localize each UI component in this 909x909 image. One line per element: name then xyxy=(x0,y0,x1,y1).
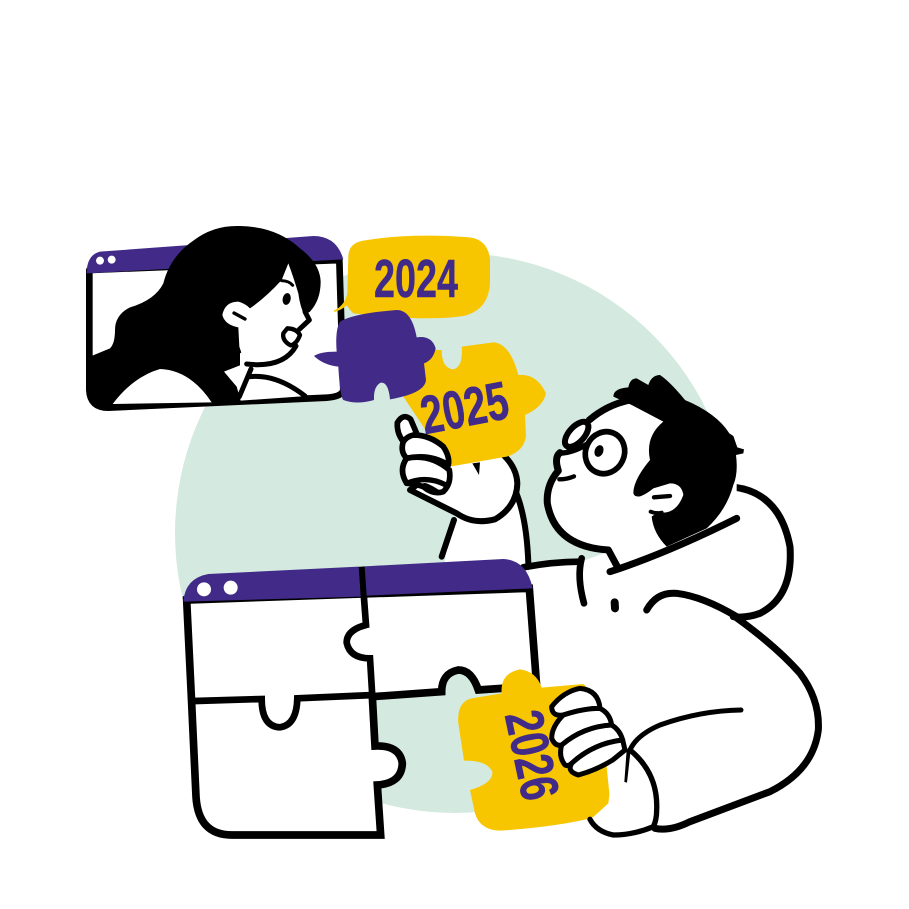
finger two xyxy=(552,708,612,745)
label 2024: 2024 xyxy=(374,249,458,309)
raised arm xyxy=(442,490,528,580)
man xyxy=(500,375,818,835)
window title bar xyxy=(87,236,343,273)
man hood xyxy=(733,487,790,617)
palm xyxy=(590,750,657,835)
woman ear line xyxy=(234,313,245,319)
finger three xyxy=(561,725,623,766)
man hair xyxy=(613,375,744,547)
title bar left xyxy=(183,567,361,602)
puzzle piece 2025 xyxy=(403,342,546,475)
woman neck area xyxy=(224,363,307,401)
finger three xyxy=(407,480,446,492)
finger one xyxy=(552,688,600,715)
woman eye xyxy=(282,292,292,306)
window: woman on video call xyxy=(87,226,343,410)
man collar xyxy=(610,518,737,572)
title bar right xyxy=(365,559,533,596)
man mouth xyxy=(559,476,574,479)
finger two xyxy=(402,457,450,493)
fingers on 2025 piece xyxy=(397,417,450,493)
man sleeve crease xyxy=(630,710,741,750)
man arm outline xyxy=(655,617,818,829)
wrist crease xyxy=(624,750,631,783)
man shoulder xyxy=(647,593,737,617)
label 2026: 2026 xyxy=(493,705,570,806)
woman hair xyxy=(90,226,321,410)
label 2025: 2025 xyxy=(416,370,513,446)
woman shoulder xyxy=(113,369,212,404)
man hand on 2026 xyxy=(552,688,657,835)
woman mouth xyxy=(283,328,300,345)
puzzle piece 2026 xyxy=(458,669,610,831)
glasses large lens xyxy=(578,425,632,480)
woman face xyxy=(222,263,305,367)
window frame xyxy=(89,260,343,408)
woman eyebrow xyxy=(282,281,293,285)
man collar stand xyxy=(580,558,584,603)
palm crease xyxy=(472,462,480,475)
man pupil xyxy=(593,444,605,458)
vertical seam xyxy=(347,567,372,697)
background circle xyxy=(175,253,735,813)
window dots xyxy=(96,256,116,265)
puzzle body fill and outline xyxy=(187,588,537,835)
woman nose xyxy=(299,312,309,329)
finger four xyxy=(570,740,625,775)
finger one xyxy=(402,435,449,465)
horizontal seam xyxy=(195,695,374,727)
purple puzzle piece speech bubble xyxy=(314,310,436,402)
hand and arm holding 2025 xyxy=(410,453,528,580)
speech bubble 2024 xyxy=(334,236,490,318)
glasses bridge xyxy=(559,444,587,453)
title bar dots xyxy=(197,581,238,596)
man chest top xyxy=(523,562,580,567)
woman chin xyxy=(247,346,296,365)
glasses small lens xyxy=(561,418,593,451)
man face xyxy=(547,400,737,568)
woman collar xyxy=(239,369,251,397)
puzzle window xyxy=(183,559,537,835)
palm xyxy=(410,453,517,521)
man button xyxy=(603,602,627,608)
woman shirt line xyxy=(250,376,305,396)
man ear xyxy=(650,483,683,513)
man body xyxy=(500,487,818,835)
thumb xyxy=(397,417,417,442)
